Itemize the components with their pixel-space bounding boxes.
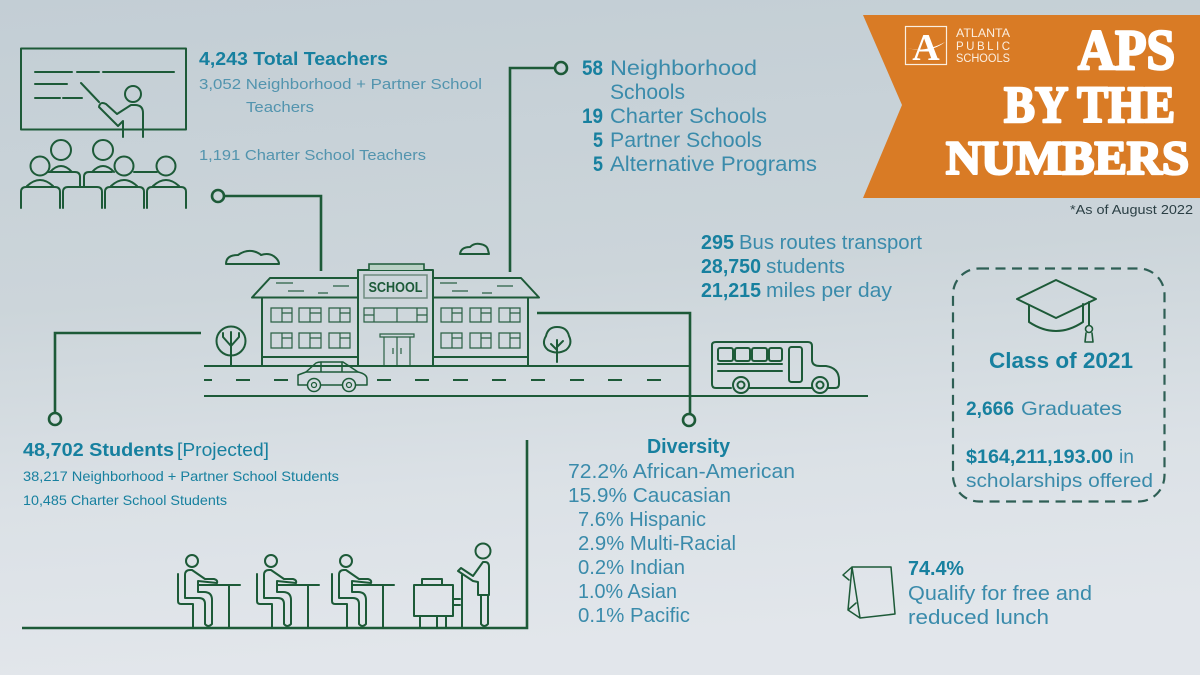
logo: Atlanta Public Schools: A — [912, 27, 940, 69]
text: school counts: 5 — [593, 129, 603, 152]
icon: school bus — [712, 342, 839, 393]
icon: teacher and classroom — [21, 48, 186, 208]
text: bus stats: 28,750 — [701, 256, 761, 278]
text: lunch: reduced lunch — [908, 607, 1049, 629]
text: students: [Projected] — [177, 440, 269, 460]
text: students: 38,217 Neighborhood + Partner School Students — [23, 468, 339, 484]
connector: diversity — [537, 313, 695, 426]
text: teachers: 4,243 Total Teachers — [199, 49, 388, 69]
stats — [966, 398, 1153, 492]
icon: student 2 — [257, 555, 319, 628]
icon: tree left — [216, 326, 246, 366]
banner: APS by the numbers — [863, 15, 1200, 198]
banner ribbon — [863, 15, 1200, 198]
text: teachers — [199, 49, 482, 164]
stats: 2,666 — [966, 398, 1014, 420]
title: NUMBERS — [946, 132, 1189, 185]
panel: class of 2021 — [953, 268, 1164, 502]
icon: student 1 — [178, 555, 240, 628]
stats: in — [1119, 446, 1134, 468]
text: bus stats — [701, 232, 922, 302]
text: students: 10,485 Charter School Students — [23, 492, 227, 508]
text: school counts: Alternative Programs — [610, 153, 817, 176]
connector: teachers — [212, 190, 321, 271]
text: teachers: Teachers — [246, 99, 314, 116]
text: diversity: 72.2% African-American — [568, 461, 795, 483]
logo: Atlanta Public Schools: PUBLIC — [956, 41, 1010, 53]
text: lunch: Qualify for free and — [908, 583, 1092, 605]
text: diversity — [568, 436, 795, 627]
text: school counts: Schools — [610, 81, 685, 104]
icon: lunch bag — [843, 567, 895, 618]
icon: school building — [252, 264, 539, 366]
text: school counts: 19 — [582, 105, 603, 128]
text: diversity: Diversity — [647, 436, 731, 458]
text: school counts: 58 — [582, 57, 603, 80]
text: school counts — [582, 57, 817, 176]
icon: graduation cap — [1017, 280, 1096, 342]
icon: car — [298, 362, 367, 392]
text: bus stats: 21,215 — [701, 280, 761, 302]
text: diversity: 0.2% Indian — [578, 557, 685, 579]
text: bus stats: students — [766, 256, 845, 278]
text: diversity: 0.1% Pacific — [578, 605, 690, 627]
text: school counts: 5 — [593, 153, 603, 176]
text: lunch — [908, 558, 1092, 629]
text: school counts: Neighborhood — [610, 57, 757, 80]
text: bus stats: miles per day — [766, 280, 892, 302]
illustration: school and road — [204, 244, 868, 396]
stats: $164,211,193.00 — [966, 446, 1113, 468]
road lines — [204, 366, 868, 396]
stats: scholarships offered — [966, 470, 1153, 492]
text: students: 48,702 Students — [23, 440, 174, 460]
icon: teacher at desk — [414, 544, 490, 628]
text: bus stats: 295 — [701, 232, 734, 254]
connector: students — [49, 333, 201, 425]
heading: Class of 2021 — [989, 348, 1133, 373]
dashed outline — [953, 268, 1164, 502]
icon: student 3 — [332, 555, 394, 628]
text: lunch: 74.4% — [908, 558, 964, 580]
text: diversity: 2.9% Multi-Racial — [578, 533, 736, 555]
text: bus stats: Bus routes transport — [739, 232, 922, 254]
text: diversity: 1.0% Asian — [578, 581, 677, 603]
footnote: *As of August 2022 — [1070, 202, 1193, 217]
logo: Atlanta Public Schools — [906, 26, 1010, 69]
icon: tree right — [544, 327, 570, 362]
title: APS — [1078, 19, 1175, 82]
logo: Atlanta Public Schools: ATLANTA — [956, 28, 1010, 40]
icon: school building: SCHOOL — [368, 280, 423, 296]
logo: Atlanta Public Schools: SCHOOLS — [956, 53, 1010, 65]
text: school counts: Partner Schools — [610, 129, 762, 152]
connector: schools — [510, 62, 567, 272]
stats: Graduates — [1021, 398, 1122, 420]
title: BY THE — [1004, 77, 1175, 134]
icon: clouds — [226, 244, 489, 264]
text: diversity: 7.6% Hispanic — [578, 509, 706, 531]
text: students — [23, 440, 339, 508]
text: teachers: 3,052 Neighborhood + Partner School — [199, 76, 482, 93]
title — [946, 19, 1189, 185]
illustration: students at desks — [22, 440, 527, 628]
text: diversity: 15.9% Caucasian — [568, 485, 731, 507]
text: school counts: Charter Schools — [610, 105, 767, 128]
text: teachers: 1,191 Charter School Teachers — [199, 147, 426, 164]
